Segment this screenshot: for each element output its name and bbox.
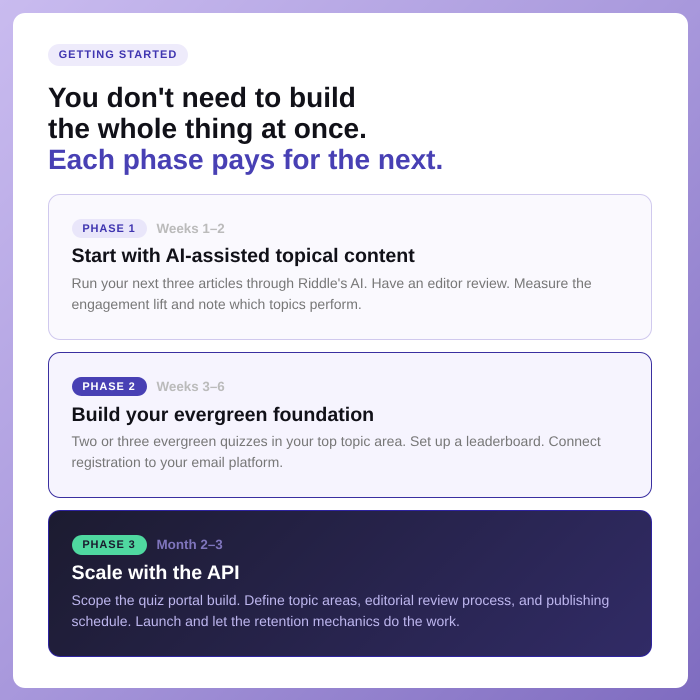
badge: phase 2 [72, 377, 146, 396]
heading: the whole thing at once. [48, 113, 367, 144]
panel: phase 3 [48, 510, 652, 657]
timing: weeks 3-6: Weeks 3–6 [156, 379, 225, 394]
badge: phase 3: PHASE 3 [82, 539, 136, 551]
phase 2 title: Build your evergreen foundation [72, 404, 374, 426]
phase 3 title: Scale with the API [72, 562, 240, 584]
phase 1 description: Run your next three articles through Riddle's AI. Have an editor review. Measure the [72, 274, 592, 290]
phase 2 description: Two or three evergreen quizzes in your top topic area. Set up a leaderboard. Connect [72, 433, 601, 449]
phase 2 description [72, 433, 601, 470]
phase 1 description: engagement lift and note which topics perform. [72, 296, 362, 312]
phase 1 title: Start with AI-assisted topical content [72, 245, 415, 267]
tag: getting started [48, 44, 188, 66]
panel: phase 1 [48, 194, 652, 340]
timing: weeks 1-2: Weeks 1–2 [156, 220, 225, 236]
phase 1 description [72, 274, 592, 312]
timing: month 2-3: Month 2–3 [156, 537, 223, 552]
badge: phase 2: PHASE 2 [82, 381, 136, 393]
heading: You don't need to build [48, 82, 356, 113]
badge: phase 3 [72, 535, 146, 554]
heading [48, 82, 443, 175]
phase 3 description: Scope the quiz portal build. Define topic areas, editorial review process, and publishing [72, 592, 609, 608]
heading: Each phase pays for the next. [48, 144, 443, 175]
phase 2 description: registration to your email platform. [72, 454, 283, 470]
panel: phase 2 [48, 352, 652, 498]
phase 3 description: schedule. Launch and let the retention mechanics do the work. [72, 613, 460, 629]
badge: phase 1: PHASE 1 [82, 222, 136, 234]
badge: phase 1 [72, 218, 146, 238]
tag: getting started: GETTING STARTED [59, 49, 177, 61]
phase 3 description [72, 592, 609, 629]
